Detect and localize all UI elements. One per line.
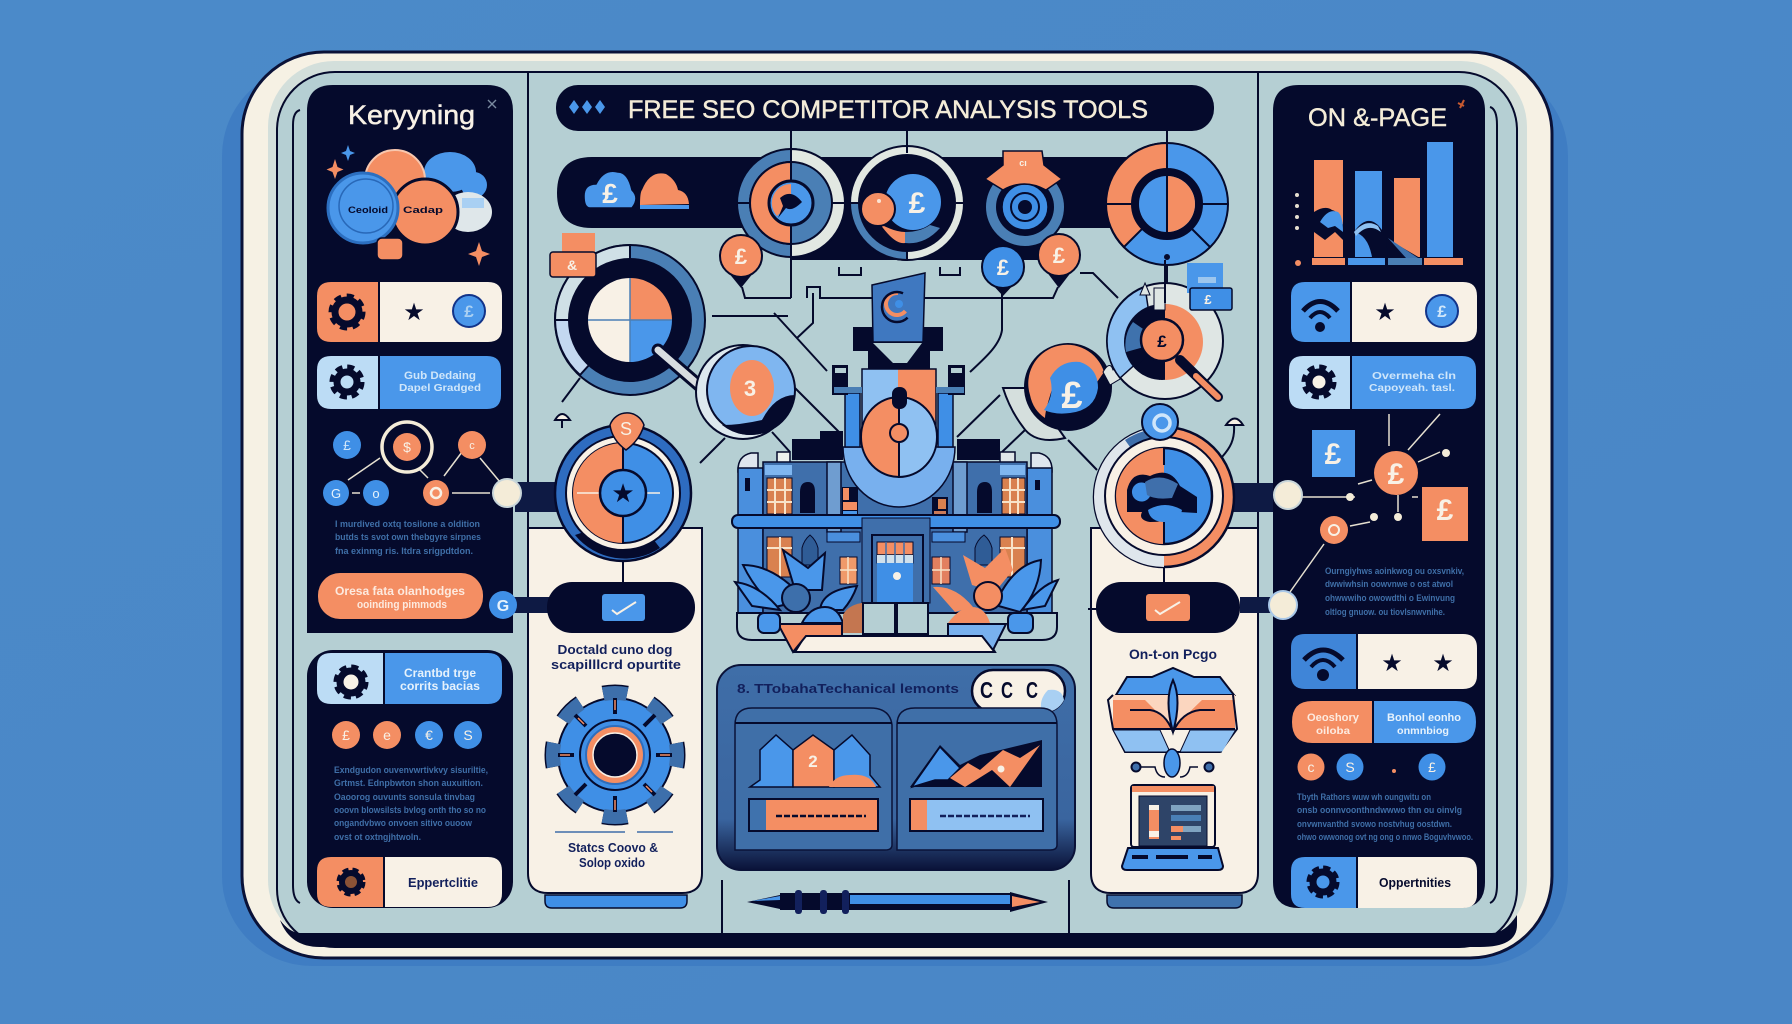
text block: ohwo owwonog ovt ng ong o nnwo Boguvhvwoo. xyxy=(1297,832,1473,843)
panel: keyword research (left) xyxy=(307,85,513,633)
text block: onvwnvanthd svowo nostvhug oostdwn. xyxy=(1297,819,1452,830)
icon: split diagram xyxy=(1108,668,1237,777)
pins: £ xyxy=(735,244,748,269)
windows xyxy=(732,478,1060,584)
row: two-tone labels: Oeoshory xyxy=(1307,712,1360,724)
row: two-tone labels: onmnbiog xyxy=(1397,725,1449,737)
text block xyxy=(334,765,488,843)
icon: blue folder xyxy=(1187,263,1232,310)
row: gear and Oppertnities xyxy=(1291,857,1477,908)
network diagram xyxy=(1269,414,1468,619)
row: gear and Eppertclitie xyxy=(317,857,502,907)
icon: blue folder: £ xyxy=(1204,292,1212,307)
pins: £ xyxy=(997,255,1010,280)
cream panel left xyxy=(489,528,702,908)
coins row: S xyxy=(463,727,473,743)
text block: Oaoorog ouvunts sonsula tinvbag xyxy=(334,792,475,803)
text block: ooovn blowsilsts bvlog onth tho so no xyxy=(334,805,486,816)
text block: onsb oonnvoonthndwwwo thn ou oinvlg xyxy=(1297,805,1462,816)
text block: fna exinmg ris. Itdra srigpdtdon. xyxy=(335,546,473,557)
text block: I murdived oxtq tosilone a oldition xyxy=(335,519,480,530)
battlements xyxy=(832,327,965,395)
heading: Keryyning: Keryyning xyxy=(348,100,475,130)
panel: lower left opportunities xyxy=(307,650,513,908)
coins row: £ xyxy=(1428,759,1436,775)
icon: logo coin in band: £ xyxy=(602,178,618,209)
castle building xyxy=(732,273,1060,652)
coins row: S xyxy=(1345,759,1355,775)
row: gear and label: corrits bacias xyxy=(400,679,480,693)
flag with logo xyxy=(872,273,925,342)
cream panel right xyxy=(1088,528,1280,908)
pill with C marks: C xyxy=(1026,677,1038,703)
panel: on-page (right) xyxy=(1269,85,1485,908)
icon: sparkles xyxy=(326,100,496,266)
row: wifi and rating: £ xyxy=(1437,302,1447,321)
title pill: FREE SEO COMPETITOR ANALYSIS TOOLS xyxy=(628,96,1148,124)
icon: pencil xyxy=(747,890,1048,914)
callout: orange pill xyxy=(318,573,483,619)
text block: ovst ot oxtngjhtwoln. xyxy=(334,832,421,843)
caption text: Statcs Coovo & xyxy=(568,841,658,855)
big left dial xyxy=(493,413,691,561)
big left dial: ★ xyxy=(611,478,635,508)
row: two-tone labels: oiloba xyxy=(1316,726,1350,737)
row: gear and label: Crantbd trge xyxy=(404,666,476,680)
heading text: Doctald cuno dog xyxy=(558,642,673,657)
roofs xyxy=(792,431,1000,460)
central shield crescent xyxy=(843,369,955,507)
cream panel left: Solop oxido xyxy=(579,856,645,870)
left wing and tower xyxy=(738,452,1052,613)
row: wifi and stars: ★ xyxy=(1381,650,1403,677)
text block: butds ts svot own thebgyre sirpnes xyxy=(335,532,481,543)
heading text: On-t-on Pcgo xyxy=(1129,647,1217,662)
row: wifi and stars: ★ xyxy=(1432,650,1454,677)
donut 3 with shield: cı xyxy=(1019,158,1027,168)
magnifier right: £ xyxy=(1157,332,1167,351)
row: gear and label: Gub Dedaing xyxy=(404,370,476,382)
coins row: c xyxy=(1308,759,1314,775)
icon: overlapping keyword circles: Cadap xyxy=(403,205,443,216)
network diagram: $ xyxy=(403,439,411,455)
coins row: € xyxy=(425,727,433,743)
lens with 3: 3 xyxy=(744,376,756,401)
icon: large gear xyxy=(553,693,677,817)
donut 2 xyxy=(850,131,964,260)
donut 4 xyxy=(1106,143,1228,265)
icon: overlapping keyword circles: Ceoloid xyxy=(348,205,388,216)
chart panel left xyxy=(735,708,892,850)
donut 3 with shield xyxy=(985,151,1065,247)
dark band behind donuts xyxy=(557,157,1127,260)
connector lines xyxy=(555,131,1243,470)
pill with check xyxy=(1088,555,1280,633)
donut 2: £ xyxy=(909,187,926,220)
row: wifi and rating: ★ xyxy=(1374,299,1396,326)
door block xyxy=(862,518,930,603)
row: two-tone labels: Bonhol eonho xyxy=(1387,712,1461,724)
row: gear and Oppertnities: Oppertnities xyxy=(1379,876,1451,890)
£ lens: £ xyxy=(1061,375,1083,417)
£ lens xyxy=(1003,343,1132,440)
plant left xyxy=(735,550,862,633)
text block xyxy=(335,519,481,557)
text block: Ourngiyhws aoinkwog ou oxsvnkiv, xyxy=(1325,566,1464,577)
donut 1 xyxy=(737,149,845,257)
icon: orange folder: & xyxy=(567,257,577,273)
callout: orange pill: ooinding pimmods xyxy=(357,599,447,611)
row: two-tone labels xyxy=(1292,701,1476,743)
row: gear and rating: ★ xyxy=(403,299,425,326)
icon: laptop xyxy=(1122,785,1223,870)
big left dial: S xyxy=(620,419,632,439)
text block: Grtmst. Ednpbwton shon auxuition. xyxy=(334,778,483,789)
magnifier right xyxy=(1107,260,1223,399)
pill with C marks xyxy=(972,670,1065,713)
title pill xyxy=(556,85,1214,131)
row: gear and label xyxy=(1289,356,1476,409)
row: wifi and rating xyxy=(1291,282,1477,342)
pill with C marks: C xyxy=(1001,677,1013,703)
row: gear and label: Overmeha cln xyxy=(1372,370,1456,382)
network diagram: £ xyxy=(343,437,351,453)
row: gear and label: Capoyeah. tasl. xyxy=(1369,382,1455,394)
pins xyxy=(720,234,1080,296)
pill with C marks: C xyxy=(980,677,993,703)
plant right xyxy=(933,548,1058,633)
heading: ON &-PAGE xyxy=(1308,104,1447,132)
panel: technical elements xyxy=(717,665,1075,870)
text block: ongandvbwo onvoen sitivo ouoow xyxy=(334,818,473,829)
text block: dwwiwhsin oowvnwe o ost atwol xyxy=(1325,579,1453,590)
coins row: £ xyxy=(342,727,350,743)
row: gear and label xyxy=(317,356,501,409)
pins: £ xyxy=(1053,243,1066,268)
coins row xyxy=(1298,754,1446,780)
connector coin xyxy=(489,591,560,619)
row: gear and label xyxy=(317,653,502,704)
network diagram: G xyxy=(331,486,341,501)
row: gear and rating: £ xyxy=(464,302,474,321)
magnifier left xyxy=(555,245,705,395)
callout: orange pill: Oresa fata olanhodges xyxy=(335,586,465,598)
pill with check xyxy=(547,555,695,633)
big right dial xyxy=(1094,404,1277,567)
text block xyxy=(1297,792,1473,843)
icon: orange folder xyxy=(550,233,596,277)
chart panel right xyxy=(897,708,1057,850)
chart panel left: 2 xyxy=(808,752,818,771)
network diagram: c xyxy=(469,440,475,452)
icon: logo coin in band xyxy=(584,171,689,209)
text block xyxy=(1325,566,1464,618)
network diagram: £ xyxy=(1325,438,1342,471)
row: wifi and stars xyxy=(1291,634,1477,689)
icon: overlapping keyword circles xyxy=(328,150,492,260)
network diagram: £ xyxy=(1437,494,1454,527)
lens with 3 xyxy=(696,345,795,439)
text block: ohwwwiho owowdthi o Ewinvung xyxy=(1325,593,1455,604)
bar chart xyxy=(1295,142,1463,266)
network diagram: o xyxy=(372,486,380,501)
steps and base xyxy=(737,603,1057,652)
row: gear and label: Dapel Gradged xyxy=(399,382,481,394)
heading: 8. TTobahaTechanical lemonts xyxy=(737,681,959,696)
coins row: e xyxy=(383,727,391,743)
row: gear and rating xyxy=(317,282,502,342)
frame: outer card xyxy=(242,52,1552,958)
row: gear and Eppertclitie: Eppertclitie xyxy=(408,876,478,890)
connector coin: G xyxy=(497,598,509,615)
text block: oltlog gnuow. ou tiovlsnwvnihe. xyxy=(1325,607,1445,618)
cream panel left: scapilllcrd opurtite xyxy=(551,657,681,672)
text block: Exndgudon ouvenvwrtivkvy sisuriltie, xyxy=(334,765,488,776)
network diagram xyxy=(323,422,500,506)
coins row xyxy=(332,721,482,749)
network diagram: £ xyxy=(1388,458,1405,491)
text block: Tbyth Rathors wuw wh oungwitu on xyxy=(1297,792,1431,803)
